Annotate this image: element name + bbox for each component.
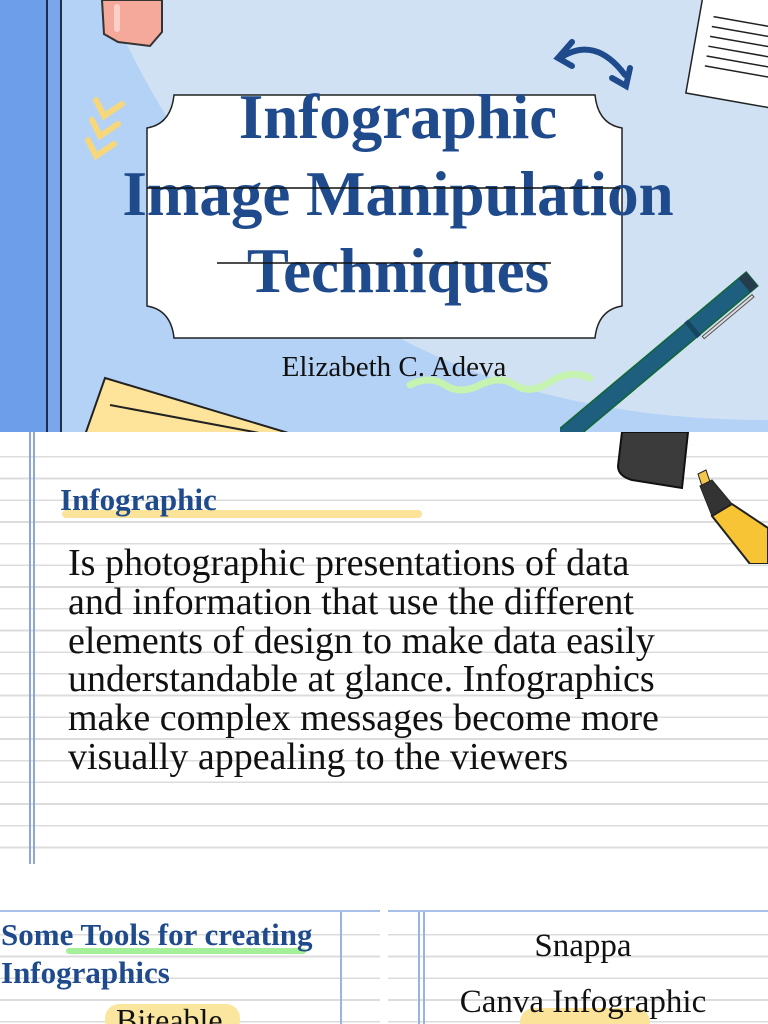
heading: Some Tools for creating [1,917,312,952]
heading [1,917,312,990]
icon: highlighter [697,469,768,564]
icon: yellow chevrons [85,97,125,160]
slide: tools right [388,910,768,1024]
author: Elizabeth C. Adeva [282,351,506,383]
slide: tools left [0,910,380,1024]
body text: understandable at glance. Infographics [68,658,655,700]
icon: paper note [685,0,768,108]
icon: curved arrow [553,39,633,90]
tool list: Canva Infographic [460,984,706,1020]
yellow highlight [520,1008,650,1024]
title: Image Manipulation [122,159,674,229]
background curve [0,0,768,432]
tool list: Snappa [534,928,632,964]
body text: Is photographic presentations of data [68,542,629,584]
heading: Infographic [60,482,217,517]
slide: infographic definition [0,432,768,864]
strike lines [147,187,620,264]
icon: yellow paper [85,376,288,432]
tool list [460,928,706,1020]
icon: eraser [101,0,163,47]
body text: visually appealing to the viewers [68,736,568,778]
green squiggle [406,370,594,394]
title: Infographic [239,82,557,152]
yellow highlight [105,1004,240,1024]
highlight [62,510,422,518]
title [122,82,674,306]
title frame [146,94,623,339]
icon: marker cap [617,432,689,490]
body text: elements of design to make data easily [68,620,655,662]
title slide [0,0,768,432]
body text: make complex messages become more [68,697,659,739]
icon: pen [560,271,759,432]
heading: Infographics [1,955,170,990]
title: Techniques [247,236,549,306]
body text [68,542,659,778]
green highlight [66,948,306,954]
body text: and information that use the different [68,581,634,623]
